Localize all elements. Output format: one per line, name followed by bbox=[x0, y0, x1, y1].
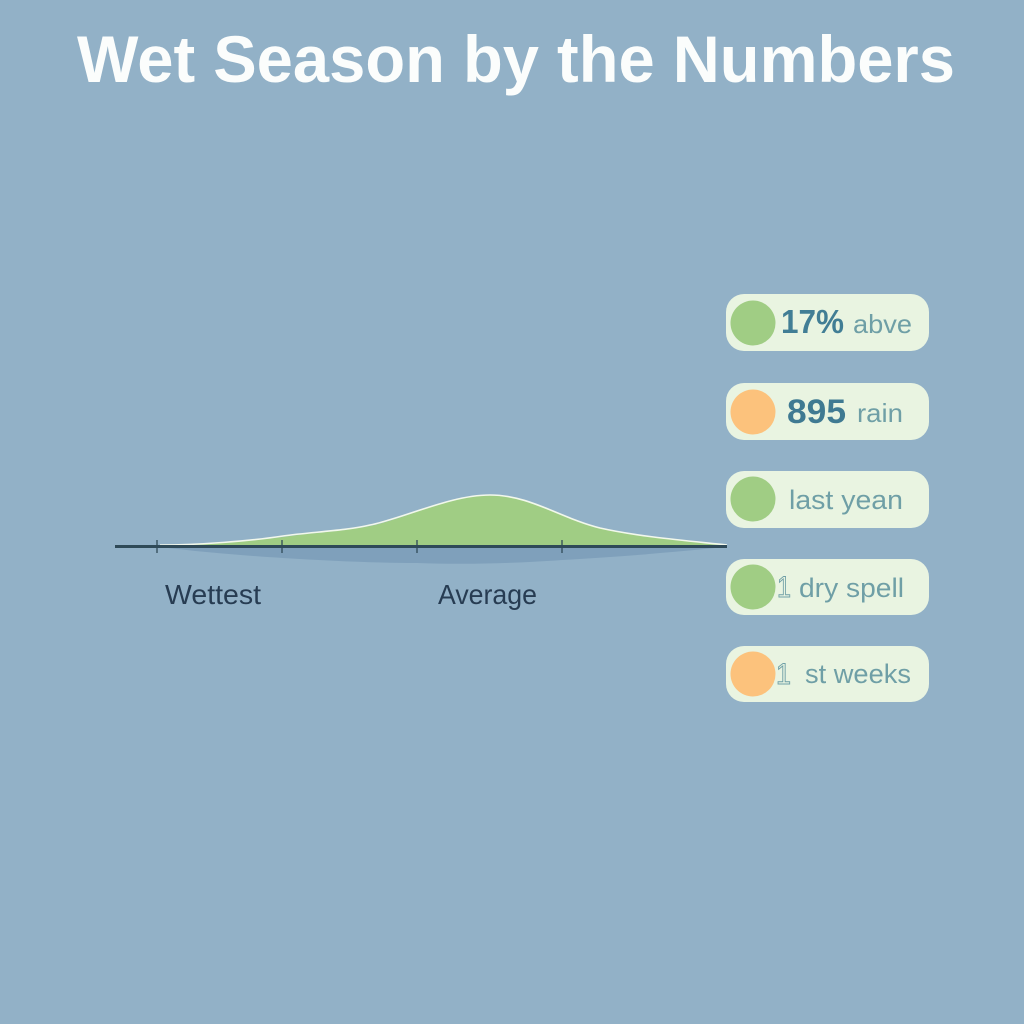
stat pill: 1 dry spell: 1 bbox=[777, 571, 791, 604]
stat pill: 895 rain: 895 bbox=[787, 393, 846, 431]
stat pill: 17% above: abve bbox=[853, 309, 912, 339]
stat pill: 1 dry spell: dry spell bbox=[799, 573, 904, 603]
stat pill: 1 st weeks: 1 bbox=[776, 658, 791, 691]
axis label: Average: Average bbox=[438, 579, 537, 610]
axis label: Wettest: Wettest bbox=[165, 579, 261, 610]
stat pill: 895 rain: rain bbox=[857, 398, 903, 428]
area chart: rainfall curve bbox=[115, 495, 727, 564]
stat pill: 1 dry spell bbox=[726, 559, 929, 615]
stat pill: last year: last yean bbox=[789, 485, 903, 515]
axis line bbox=[115, 545, 727, 548]
title: Wet Season by the Numbers bbox=[77, 22, 955, 96]
chart shadow bbox=[160, 547, 725, 564]
stat pill: 17% above: 17% bbox=[781, 303, 844, 340]
stat pill: 17% above bbox=[726, 294, 929, 351]
stat pill: last year bbox=[726, 471, 929, 528]
curve outline bbox=[160, 495, 727, 545]
green area bbox=[160, 495, 727, 546]
stat pill: 1 st weeks: st weeks bbox=[805, 659, 911, 689]
axis ticks bbox=[157, 540, 562, 553]
stat pill: 895 rain bbox=[726, 383, 929, 440]
stat pill: 1 st weeks bbox=[726, 646, 929, 702]
